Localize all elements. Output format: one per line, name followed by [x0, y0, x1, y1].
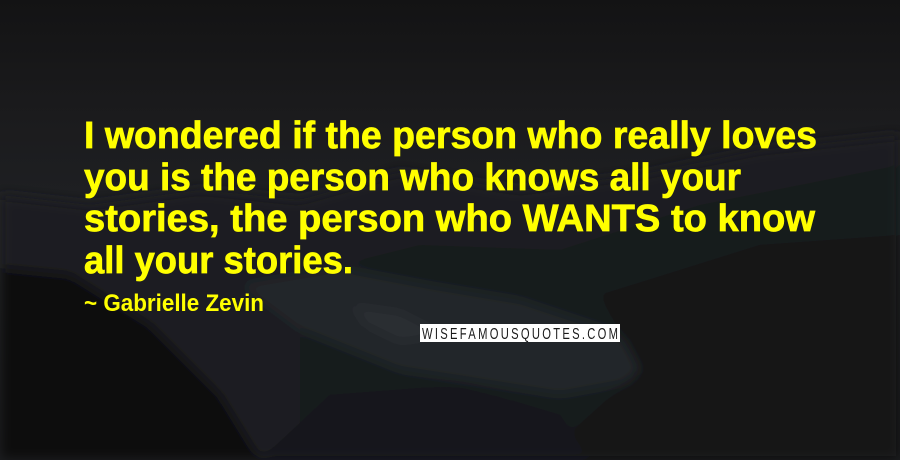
- quote text: all your stories.: [84, 240, 353, 282]
- quote text: you is the person who knows all your: [84, 157, 741, 199]
- quote text: I wondered if the person who really loves: [84, 115, 817, 157]
- background: mountain landscape: [0, 135, 900, 460]
- watermark: WISEFAMOUSQUOTES.COM: [422, 324, 618, 342]
- quote text: [84, 115, 817, 282]
- quote text: stories, the person who WANTS to know: [84, 198, 815, 240]
- attribution: ~ Gabrielle Zevin: [84, 290, 264, 317]
